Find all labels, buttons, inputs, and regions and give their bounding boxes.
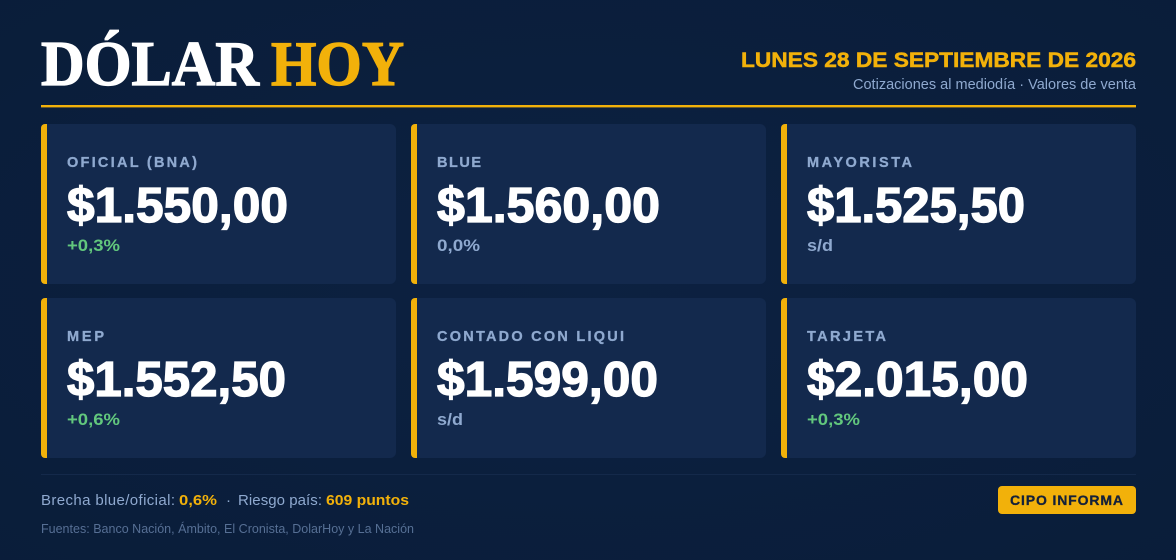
panel: mep — [41, 298, 396, 458]
value: mayorista: $1.525,50 — [807, 179, 1025, 233]
panel: mayorista — [781, 124, 1136, 284]
panel: contado con liqui — [411, 298, 766, 458]
title: DÓLAR — [41, 29, 260, 99]
label: blue: BLUE — [437, 155, 481, 171]
value: oficial: $1.550,00 — [67, 179, 288, 233]
panel: oficial — [41, 124, 396, 284]
summary line: Brecha blue/oficial: — [41, 492, 175, 509]
summary line: 609 puntos — [326, 492, 409, 509]
panel: blue — [411, 124, 766, 284]
panel: tarjeta — [781, 298, 1136, 458]
badge: cipo informa — [998, 486, 1136, 514]
summary line — [41, 492, 409, 509]
date heading: LUNES 28 DE SEPTIEMBRE DE 2026 — [741, 49, 1136, 72]
title: HOY — [271, 29, 404, 99]
summary line: · — [226, 492, 231, 509]
label: tarjeta: TARJETA — [807, 329, 887, 345]
summary line: Riesgo país: — [238, 492, 322, 509]
change: mep: +0,6% — [67, 410, 120, 429]
change: mayorista: s/d — [807, 236, 833, 255]
value: contado con liqui: $1.599,00 — [437, 353, 658, 407]
label: contado con liqui: CONTADO CON LIQUI — [437, 329, 624, 345]
summary line: 0,6% — [179, 492, 217, 509]
label: mayorista: MAYORISTA — [807, 155, 913, 171]
label: oficial: OFICIAL (BNA) — [67, 155, 197, 171]
value: tarjeta: $2.015,00 — [807, 353, 1028, 407]
value: mep: $1.552,50 — [67, 353, 286, 407]
title — [41, 29, 404, 99]
subtitle: Cotizaciones al mediodía · Valores de venta — [853, 77, 1137, 93]
label: mep: MEP — [67, 329, 104, 345]
sources: Fuentes: Banco Nación, Ámbito, El Cronista, DolarHoy y La Nación — [41, 521, 414, 536]
change: contado con liqui: s/d — [437, 410, 463, 429]
change: blue: 0,0% — [437, 236, 480, 255]
badge: cipo informa: CIPO INFORMA — [1010, 492, 1123, 508]
value: blue: $1.560,00 — [437, 179, 660, 233]
change: oficial: +0,3% — [67, 236, 120, 255]
change: tarjeta: +0,3% — [807, 410, 860, 429]
